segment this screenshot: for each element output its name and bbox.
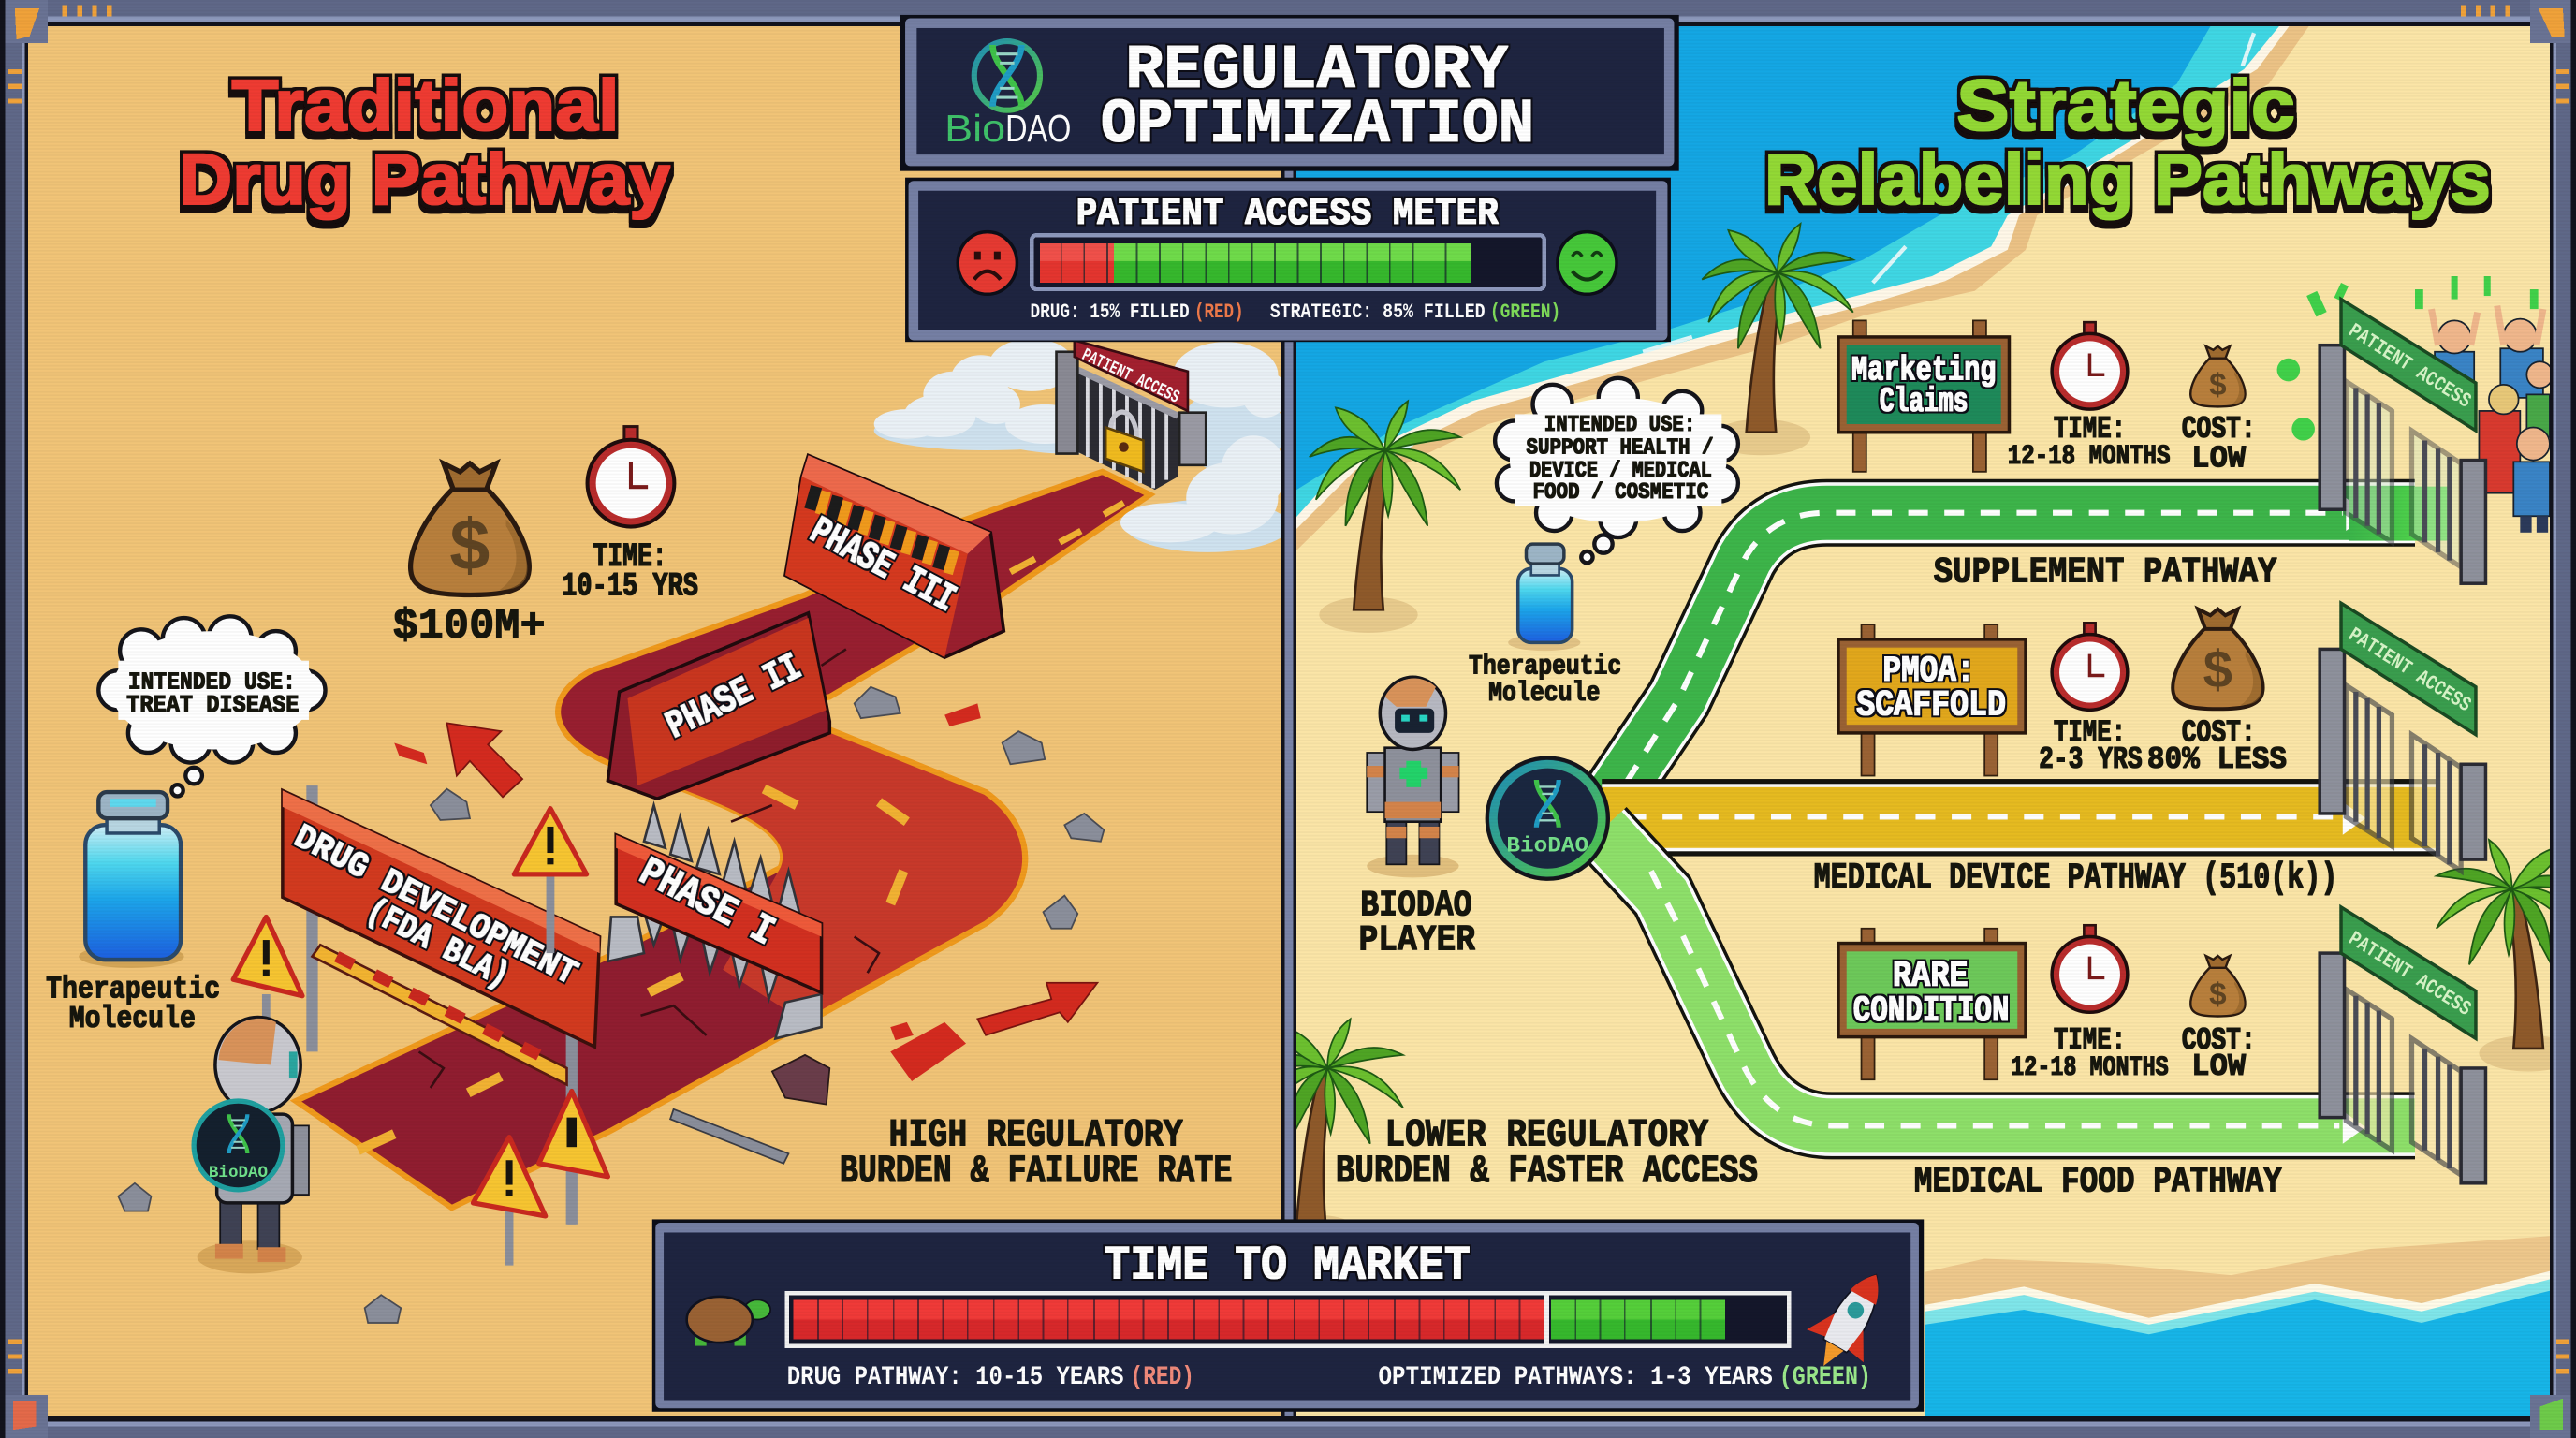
icon: money bag large: [411, 463, 529, 594]
icon: vial traditional: [79, 792, 184, 968]
heading: strategic relabeling pathways: Relabeling Pathways: [1764, 139, 2491, 220]
label: medical food time and cost: TIME:: [2054, 1023, 2126, 1059]
label: high regulatory burden and failure rate: BURDEN & FAILURE RATE: [840, 1149, 1232, 1194]
pathway: supplement green road: [1602, 487, 2448, 814]
panel: time to market: TIME TO MARKET: [1104, 1240, 1471, 1294]
sign: PMOA scaffold: PMOA:: [1882, 651, 1975, 692]
sign: marketing claims: [1838, 320, 2009, 472]
panel: regulatory optimization title: REGULATORY: [1125, 36, 1508, 107]
sign: drug development FDA BLA: (FDA BLA): [359, 892, 515, 997]
clouds and locked patient access gate: [874, 339, 1290, 552]
gate: supplement patient access: [2320, 300, 2485, 583]
time bar: red drug pathway and green optimized pathways: [787, 1293, 1789, 1346]
panel: time to market: (RED): [1131, 1363, 1194, 1392]
icon: small money bag supplement: [2190, 346, 2246, 406]
character: BioDAO player robot: [1367, 677, 1459, 877]
icon: stopwatch medical device: [2052, 623, 2128, 710]
gate: supplement patient access: PATIENT ACCESS: [2344, 319, 2475, 413]
pathway: medical device yellow road: [1602, 779, 2439, 857]
icon: stopwatch medical food: [2052, 925, 2128, 1012]
heading: traditional drug pathway: Drug Pathway: [179, 139, 670, 220]
hub: BioDAO logo node: BioDAO: [1506, 833, 1588, 858]
road: winding traditional drug path: [296, 472, 1150, 1208]
label: supplement time and cost: 12-18 MONTHS: [2008, 440, 2170, 472]
warning signs: [233, 809, 607, 1266]
label: medical device time and cost: COST:: [2182, 716, 2256, 752]
panel: traditional pathway desert background: [26, 24, 1284, 1421]
heading: strategic relabeling pathways: [1764, 66, 2491, 220]
label: high regulatory burden and failure rate: HIGH REGULATORY: [889, 1112, 1183, 1157]
meter bar: 15 percent red and 85 percent green: [1032, 235, 1544, 289]
label: supplement pathway: SUPPLEMENT PATHWAY: [1934, 551, 2277, 593]
label: BioDAO player: BIODAO: [1360, 886, 1472, 927]
label: therapeutic molecule right: Molecule: [1488, 677, 1600, 709]
label: BioDAO player: PLAYER: [1358, 920, 1476, 961]
label: lower regulatory burden and faster access: LOWER REGULATORY: [1385, 1112, 1709, 1157]
label: medical device pathway 510(k): MEDICAL DEVICE PATHWAY (510(k)): [1814, 858, 2338, 899]
sign: rare condition: CONDITION: [1853, 990, 2009, 1032]
heading: traditional drug pathway: [179, 66, 670, 220]
icon: small money bag medical food: $: [2208, 979, 2227, 1015]
label: supplement time and cost: TIME:: [2054, 412, 2126, 448]
panel: patient access meter: DRUG: 15% FILLED: [1030, 301, 1190, 324]
gate: medical food patient access: PATIENT ACCESS: [2344, 928, 2475, 1021]
panel: regulatory optimization title: [900, 15, 1679, 171]
logo: BioDAO: DAO: [1005, 107, 1071, 150]
logo: BioDAO: Bio: [944, 107, 1005, 150]
heading: traditional drug pathway: Traditional: [231, 66, 620, 146]
sign: marketing claims: Marketing: [1852, 352, 1996, 391]
sign: drug development FDA BLA: [283, 785, 600, 1225]
gate: medical device patient access: [2320, 603, 2485, 871]
icon: stopwatch supplement: [2052, 322, 2128, 409]
heading: strategic relabeling pathways: Strategic: [1956, 66, 2295, 146]
icon: happy green face: [1558, 232, 1617, 294]
thought bubble: treat disease: TREAT DISEASE: [126, 691, 299, 719]
panel: time to market: [652, 1219, 1924, 1412]
label: therapeutic molecule right: [1469, 651, 1621, 709]
panel: time to market: (GREEN): [1779, 1363, 1871, 1392]
palm trees: [1251, 224, 2576, 1251]
label: supplement time and cost: LOW: [2191, 442, 2246, 477]
icon: vial strategic: [1508, 544, 1580, 651]
logo: BioDAO: [944, 41, 1071, 150]
label: BioDAO player: [1358, 886, 1476, 961]
label: medical food time and cost: [2011, 1023, 2256, 1085]
thought bubble: intended use strategic: INTENDED USE:: [1544, 413, 1695, 438]
icon: sad red face: [958, 232, 1017, 294]
clouds and locked patient access gate: PATIENT ACCESS: [1078, 345, 1182, 408]
sign: PMOA scaffold: [1838, 624, 2026, 776]
label: medical food pathway: MEDICAL FOOD PATHWAY: [1914, 1162, 2283, 1203]
icon: money bag large: $: [448, 509, 491, 591]
icon: small money bag medical food: [2190, 956, 2246, 1016]
panel: patient access meter: (GREEN): [1490, 301, 1560, 324]
label: therapeutic molecule left: Therapeutic: [46, 972, 220, 1007]
panel: time to market: OPTIMIZED PATHWAYS: 1-3 YEARS: [1379, 1363, 1773, 1392]
label: medical device time and cost: 2-3 YRS: [2039, 742, 2143, 778]
sign: rare condition: [1838, 929, 2026, 1079]
sign: drug development FDA BLA: DRUG DEVELOPMENT: [287, 818, 583, 995]
barrier: phase III: PHASE III: [802, 508, 963, 623]
hub: BioDAO logo node: [1486, 757, 1608, 879]
crowd cheering behind gate: [2277, 276, 2553, 533]
thought bubble: intended use strategic: [1495, 378, 1738, 563]
icon: rocket: [1795, 1258, 1905, 1382]
thought bubble: treat disease: INTENDED USE:: [128, 668, 296, 697]
panel: strategic pathways beach background: [1292, 24, 2553, 1421]
label: therapeutic molecule left: [46, 972, 220, 1037]
panel: time to market: DRUG PATHWAY: 10-15 YEARS: [787, 1363, 1123, 1392]
barrier: phase III: [785, 455, 1003, 657]
red arrows and debris: [118, 687, 1104, 1323]
icon: large money bag medical device: [2173, 609, 2263, 709]
panel: patient access meter: PATIENT ACCESS METER: [1076, 193, 1499, 236]
barrier: phase II: [607, 613, 829, 799]
label: lower regulatory burden and faster access: [1336, 1112, 1758, 1194]
label: high regulatory burden and failure rate: [840, 1112, 1232, 1194]
panel: patient access meter: (RED): [1194, 301, 1244, 324]
label: medical device time and cost: [2039, 716, 2287, 778]
label: time 10-15 years: TIME:: [593, 538, 667, 576]
thought bubble: intended use strategic: SUPPORT HEALTH /: [1526, 436, 1714, 462]
barrier: phase I with spikes: PHASE I: [632, 849, 782, 957]
label: medical food time and cost: COST:: [2182, 1023, 2256, 1059]
barrier: phase I with spikes: [607, 805, 822, 1038]
label: medical food time and cost: 12-18 MONTHS: [2011, 1051, 2169, 1083]
sign: PMOA scaffold: SCAFFOLD: [1856, 685, 2006, 726]
character: astronaut with BioDAO backpack: BioDAO: [209, 1164, 268, 1182]
label: therapeutic molecule right: Therapeutic: [1469, 651, 1621, 682]
sign: rare condition: RARE: [1893, 956, 1969, 997]
thought bubble: intended use strategic: DEVICE / MEDICAL: [1530, 459, 1712, 484]
icon: small money bag supplement: $: [2208, 369, 2227, 404]
thought bubble: treat disease: [98, 616, 326, 796]
panel: regulatory optimization title: OPTIMIZATION: [1101, 90, 1534, 161]
label: lower regulatory burden and faster access: BURDEN & FASTER ACCESS: [1336, 1149, 1758, 1194]
panel: patient access meter: [905, 178, 1671, 342]
pathway: medical food light green road: [1602, 829, 2415, 1144]
icon: stopwatch traditional: [588, 427, 674, 527]
gate: medical food patient access: [2320, 907, 2485, 1183]
label: medical food time and cost: LOW: [2191, 1049, 2246, 1085]
label: medical device time and cost: 80% LESS: [2147, 742, 2287, 778]
label: time 10-15 years: 10-15 YRS: [562, 567, 698, 605]
character: astronaut with BioDAO backpack: [194, 1018, 309, 1273]
label: supplement time and cost: [2008, 412, 2256, 477]
label: medical device time and cost: TIME:: [2054, 716, 2126, 752]
thought bubble: intended use strategic: FOOD / COSMETIC: [1533, 480, 1708, 506]
label: time 10-15 years: [562, 538, 698, 605]
panel: patient access meter: STRATEGIC: 85% FILLED: [1270, 301, 1486, 324]
icon: turtle: [687, 1297, 770, 1346]
label: therapeutic molecule left: Molecule: [69, 1002, 196, 1037]
label: cost 100M: $100M+: [392, 602, 546, 651]
barrier: phase II: PHASE II: [659, 645, 809, 749]
label: supplement time and cost: COST:: [2182, 412, 2256, 448]
gate: medical device patient access: PATIENT ACCESS: [2344, 624, 2475, 717]
icon: large money bag medical device: $: [2203, 643, 2233, 703]
sign: marketing claims: Claims: [1880, 383, 1969, 422]
